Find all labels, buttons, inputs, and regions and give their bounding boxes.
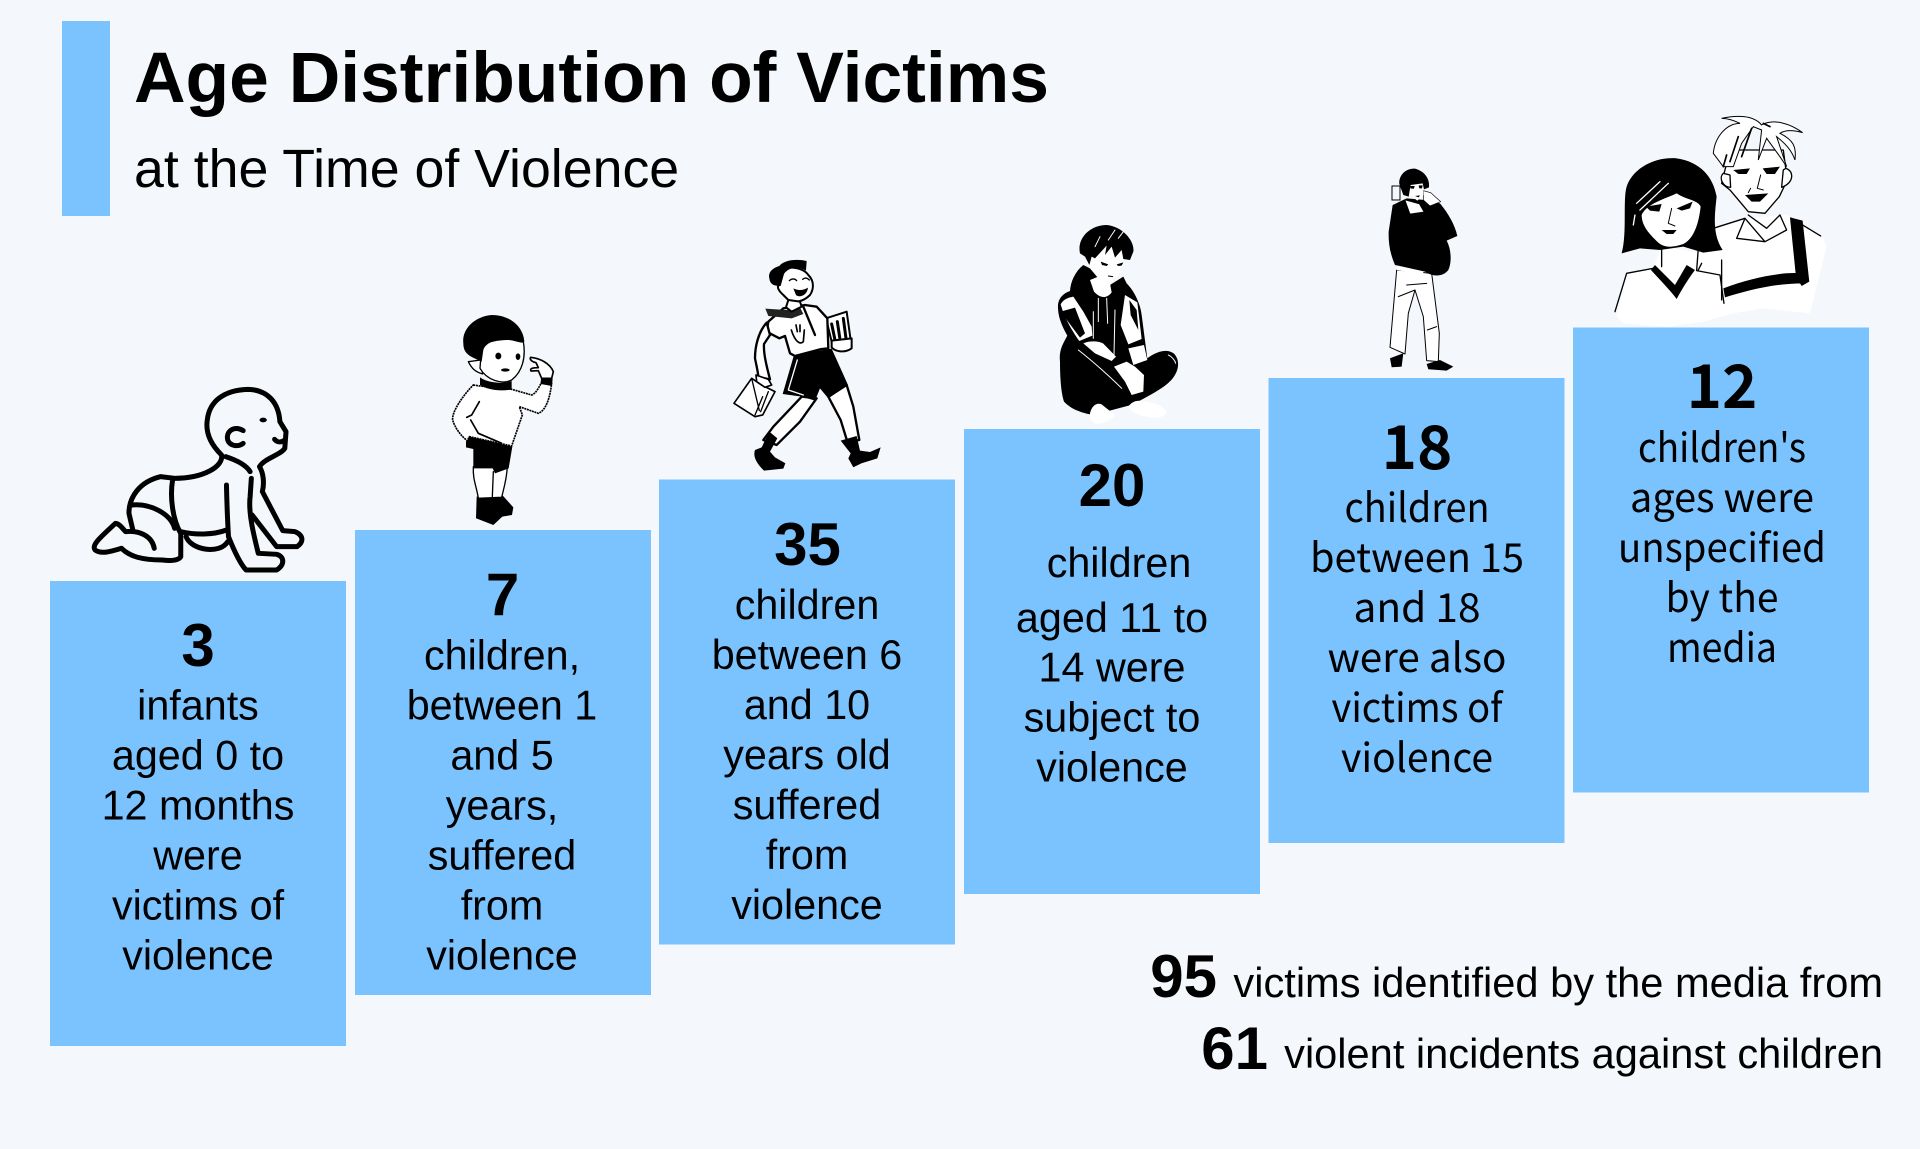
toddler hand — [530, 357, 553, 378]
schoolboy hair — [769, 260, 807, 286]
face — [1408, 182, 1423, 201]
icon: teenage couple — [1615, 116, 1827, 327]
teenager facial features — [1101, 262, 1123, 266]
white backing — [1617, 215, 1827, 327]
ages 15 to 18 description: between 15 — [1310, 526, 1524, 584]
ages 6 to 10 description: between 6 — [712, 632, 902, 678]
ages 6 to 10 description: and 10 — [744, 682, 870, 728]
hair — [1399, 169, 1429, 197]
teenager cuffs — [1083, 341, 1147, 365]
panel: infants — [50, 581, 346, 1046]
schoolboy books — [826, 312, 851, 342]
toddler collar — [480, 377, 512, 390]
infants count: 3 — [181, 612, 215, 679]
girl face — [1642, 193, 1701, 247]
girl collar — [1651, 265, 1695, 299]
ages 6 to 10 description: violence — [731, 882, 883, 928]
ages 6 to 10 count: 35 — [774, 511, 841, 578]
girl shirt — [1615, 247, 1724, 312]
boy shirt — [1713, 215, 1821, 300]
icon: toddler — [453, 315, 553, 525]
panel: ages 15 to 18 — [1268, 378, 1564, 843]
phone — [1392, 186, 1400, 200]
total incidents: 61 — [1201, 1015, 1268, 1082]
ages 11 to 14 description: 14 were — [1039, 644, 1185, 690]
toddler ear — [468, 360, 483, 374]
totals callout — [1150, 943, 1883, 1082]
shoes — [1390, 353, 1453, 371]
infants description: infants — [137, 682, 259, 728]
unspecified description: by the — [1666, 566, 1778, 624]
unspecified count: 12 — [1687, 339, 1757, 426]
toddler hair — [463, 315, 524, 362]
girl face features — [1646, 202, 1693, 234]
unspecified description — [1618, 416, 1826, 674]
teenager face — [1086, 247, 1123, 283]
total victims — [1150, 943, 1883, 1010]
panel: ages 1 to 5 — [355, 530, 651, 995]
ages 15 to 18 description: violence — [1341, 726, 1493, 784]
schoolboy arm — [755, 323, 770, 379]
infants description: violence — [122, 932, 274, 978]
boy shirt stripe and strap — [1723, 217, 1809, 297]
ages 6 to 10 description: suffered — [733, 782, 881, 828]
ages 1 to 5 description: years, — [446, 782, 558, 828]
panel: unspecified ages — [1573, 328, 1869, 792]
schoolboy shirt — [767, 305, 828, 356]
ages 15 to 18 description: children — [1344, 476, 1490, 534]
schoolboy mouth and eyes — [793, 288, 808, 296]
toddler legs — [473, 467, 507, 498]
trousers — [1390, 270, 1439, 362]
ages 11 to 14 description: aged 11 to — [1016, 595, 1208, 641]
ages 11 to 14 count: 20 — [1079, 452, 1145, 519]
schoolboy face — [778, 268, 813, 302]
infants description: aged 0 to — [112, 732, 284, 778]
ages 1 to 5 description: and 5 — [450, 732, 554, 778]
ages 15 to 18 description — [1310, 476, 1524, 784]
infants description: were — [152, 832, 243, 878]
ages 1 to 5 description: children, — [424, 632, 580, 678]
boy face features — [1733, 167, 1780, 202]
ages 15 to 18 description: were also — [1328, 626, 1506, 684]
unspecified description: children's — [1638, 416, 1806, 474]
panel: ages 6 to 10 — [659, 480, 955, 944]
icon: crawling baby — [94, 389, 302, 570]
toddler face — [480, 339, 524, 382]
raised hand — [1423, 191, 1441, 206]
teenager drawstrings — [1093, 298, 1115, 355]
schoolboy socks and shoes — [754, 432, 881, 471]
ages 1 to 5 description: suffered — [428, 832, 576, 878]
ages 11 to 14 description: children — [1047, 540, 1191, 586]
toddler sweater — [453, 382, 552, 446]
boy hair — [1713, 116, 1803, 167]
teenager feet — [1090, 401, 1166, 424]
ages 1 to 5 description: from — [461, 882, 543, 928]
girl hair — [1622, 158, 1723, 253]
teenager neck — [1090, 277, 1112, 297]
unspecified description: ages were — [1630, 466, 1814, 524]
ages 1 to 5 description: between 1 — [407, 682, 597, 728]
schoolboy necktie — [765, 307, 803, 318]
total victims: victims identified by the media from — [1233, 959, 1883, 1006]
icon: schoolboy — [734, 260, 881, 471]
teenager left sleeve — [1061, 297, 1092, 341]
schoolboy legs — [763, 397, 817, 445]
teenager right sleeve — [1121, 295, 1142, 344]
toddler facial features — [495, 353, 520, 372]
subtitle: at the Time of Violence — [134, 139, 679, 199]
ages 15 to 18 description: victims of — [1332, 676, 1504, 734]
ages 6 to 10 description: years old — [723, 732, 891, 778]
total incidents: violent incidents against children — [1284, 1030, 1883, 1077]
title: Age Distribution of Victims — [134, 38, 1049, 118]
total incidents — [1201, 1015, 1883, 1082]
toddler shoes — [476, 494, 513, 525]
toddler shorts — [466, 436, 512, 473]
unspecified description: media — [1667, 616, 1777, 674]
collar — [1405, 200, 1424, 214]
ages 6 to 10 description: children — [735, 582, 879, 628]
ages 15 to 18 count: 18 — [1382, 400, 1452, 487]
panel: ages 11 to 14 — [964, 429, 1260, 894]
infants description: victims of — [112, 882, 285, 928]
title accent bar — [62, 21, 110, 216]
schoolboy lunchbox — [734, 378, 775, 417]
ages 15 to 18 description: and 18 — [1354, 576, 1480, 634]
ages 11 to 14 description: violence — [1036, 744, 1188, 790]
ages 1 to 5 description: violence — [426, 932, 578, 978]
teenager hoodie and trousers — [1058, 265, 1178, 415]
jacket — [1389, 198, 1457, 275]
boy head — [1722, 150, 1787, 213]
schoolboy shorts — [783, 349, 848, 401]
total victims: 95 — [1150, 943, 1217, 1010]
facial features — [1410, 185, 1423, 197]
unspecified description: unspecified — [1618, 516, 1826, 574]
icon: standing teenager — [1389, 169, 1457, 371]
ages 11 to 14 description: subject to — [1024, 694, 1200, 740]
teenager hands — [1114, 362, 1144, 395]
ages 6 to 10 description: from — [766, 832, 848, 878]
teenager hair — [1079, 225, 1133, 265]
girl hair strand — [1633, 182, 1668, 225]
infants description: 12 months — [102, 782, 294, 828]
ages 1 to 5 count: 7 — [486, 561, 519, 628]
icon: sitting teenager — [1058, 225, 1178, 424]
